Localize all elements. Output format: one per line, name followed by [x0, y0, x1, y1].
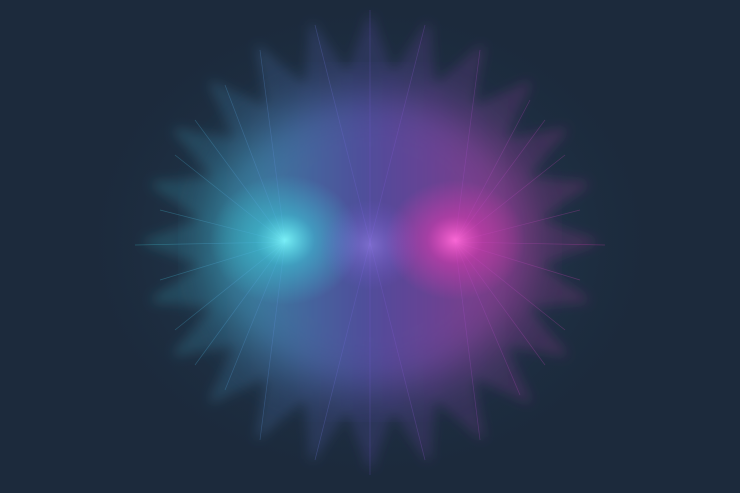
bright spot: magenta: [385, 180, 525, 300]
bright spot: cyan: [210, 175, 360, 305]
inner glowing core: [210, 92, 530, 392]
radiating lines: [135, 10, 605, 475]
bright spot: purple: [320, 200, 420, 290]
spiky burst outline: [145, 17, 595, 467]
